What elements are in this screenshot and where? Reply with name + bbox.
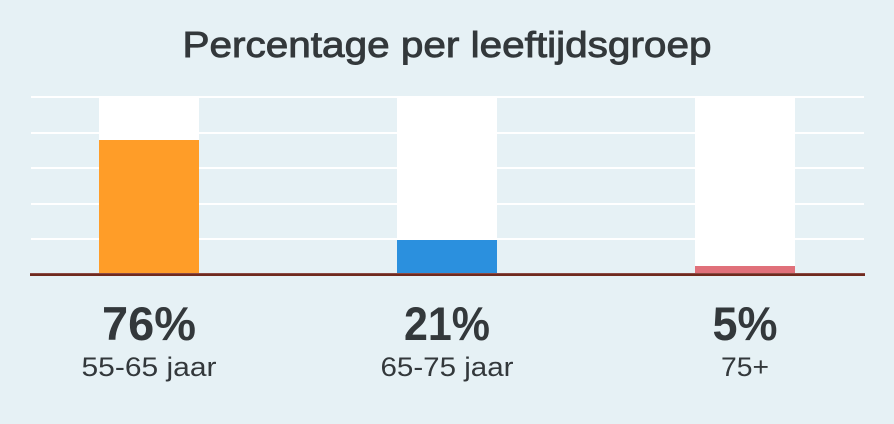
label: 65-75 jaar: 21% bbox=[404, 297, 490, 350]
label: 75+ bbox=[712, 297, 778, 382]
bar: 65-75 jaar bbox=[397, 97, 497, 274]
label: 55-65 jaar bbox=[82, 297, 216, 382]
baseline axis bbox=[30, 273, 865, 276]
label: 55-65 jaar: 55-65 jaar bbox=[82, 352, 216, 382]
label: 55-65 jaar: 76% bbox=[102, 297, 196, 350]
label: 65-75 jaar: 65-75 jaar bbox=[380, 352, 514, 382]
label: 75+: 75+ bbox=[721, 352, 769, 382]
bar: 55-65 jaar bbox=[99, 97, 199, 274]
title: Percentage per leeftijdsgroep bbox=[182, 24, 712, 65]
bar chart bbox=[30, 96, 865, 276]
label: 75+: 5% bbox=[712, 297, 778, 350]
label: 65-75 jaar bbox=[380, 297, 514, 382]
bar: 75+ bbox=[695, 97, 795, 274]
